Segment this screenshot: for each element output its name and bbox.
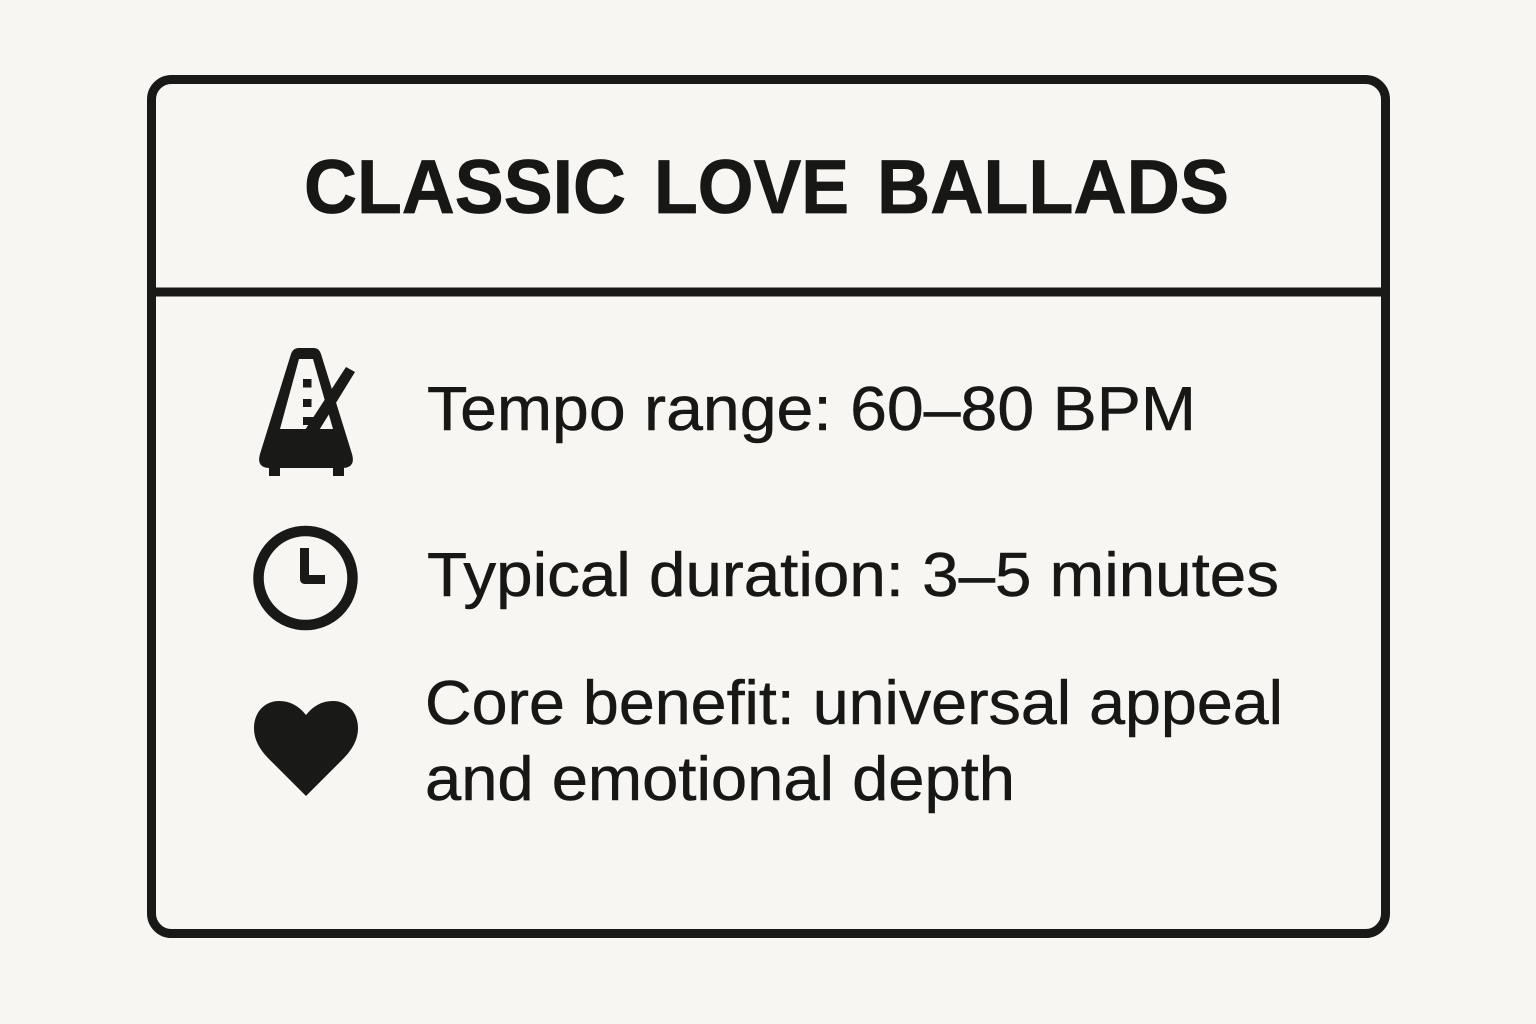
text: core benefit xyxy=(425,669,1283,814)
title: BALLADS xyxy=(877,145,1229,230)
text: core benefit: and emotional depth xyxy=(425,745,1015,814)
text: core benefit: Core benefit: universal appeal xyxy=(425,669,1283,738)
icon: heart xyxy=(254,701,358,796)
text: tempo range: Tempo range: 60–80 BPM xyxy=(427,375,1196,444)
title xyxy=(304,145,1229,230)
icon: metronome xyxy=(259,348,355,476)
title: CLASSIC xyxy=(304,145,626,230)
panel: card frame xyxy=(152,80,1386,934)
icon: clock xyxy=(258,531,352,625)
text: typical duration: Typical duration: 3–5 minutes xyxy=(427,541,1279,610)
title: LOVE xyxy=(654,145,849,230)
